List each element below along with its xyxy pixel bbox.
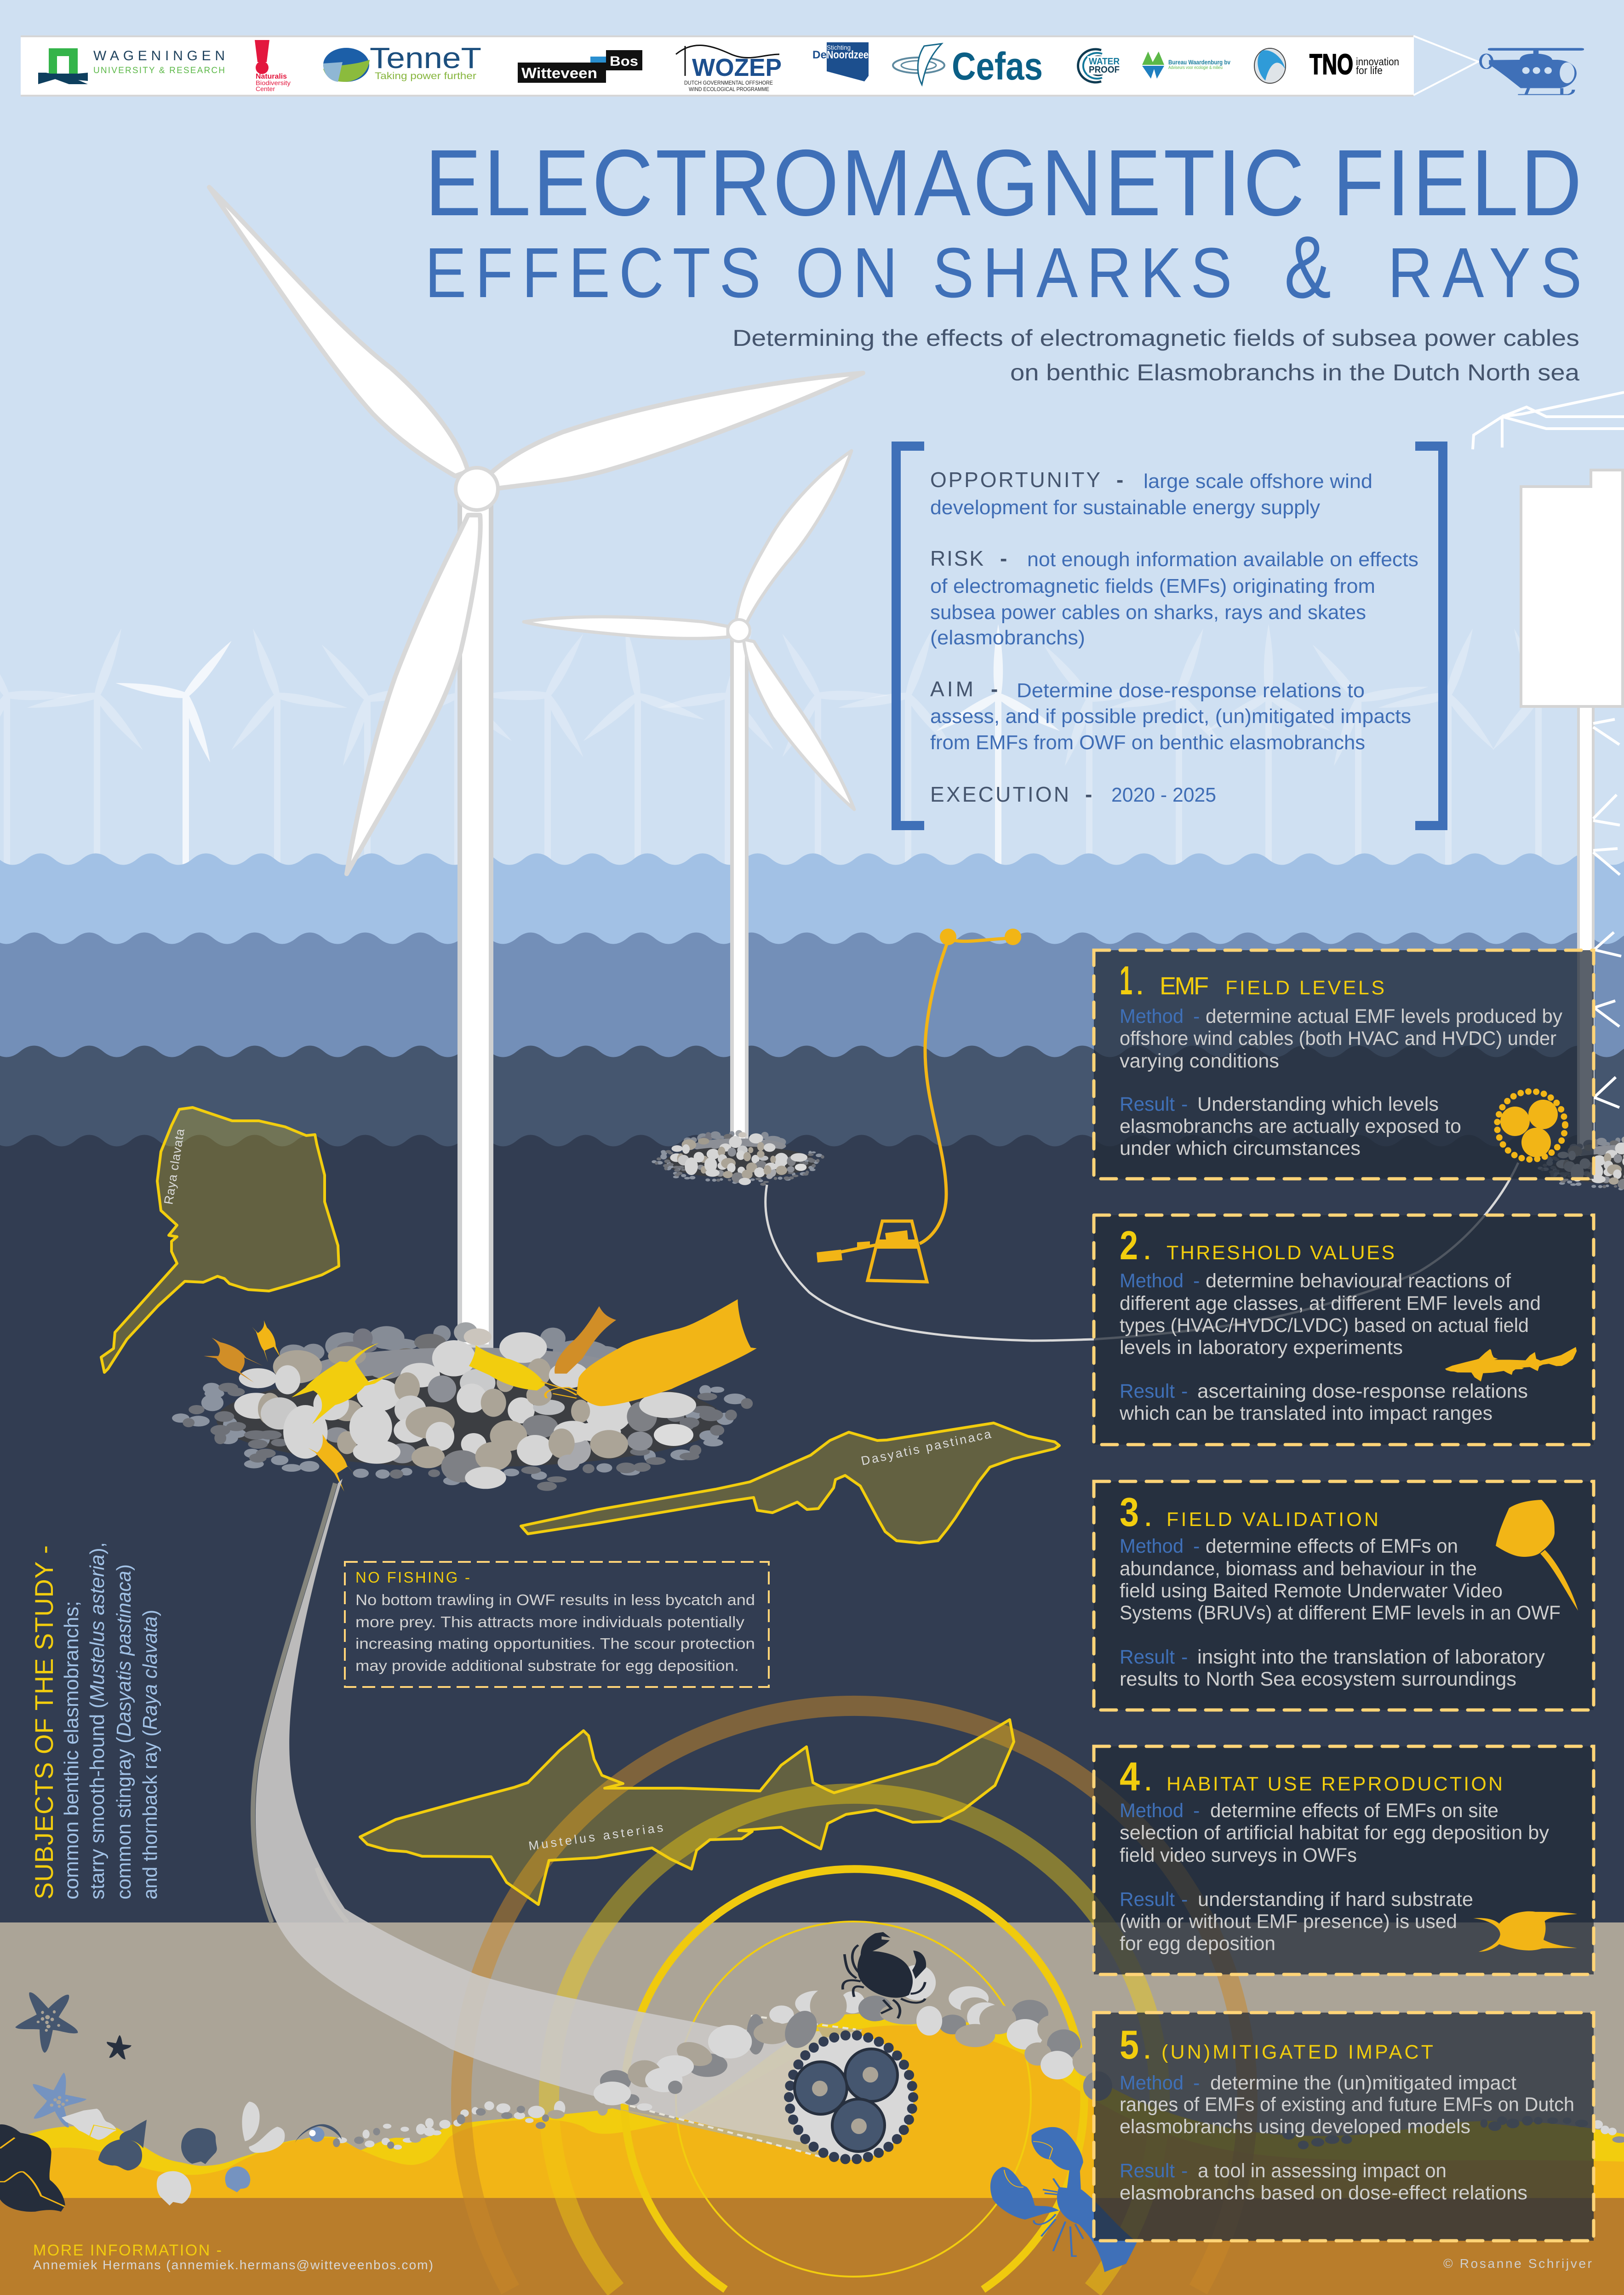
method: Method <box>1120 1270 1184 1292</box>
execution text: 2020 - 2025 <box>1111 784 1216 806</box>
result <box>1120 1646 1545 1690</box>
heading: THRESHOLD VALUES <box>1167 1242 1395 1264</box>
callout: no fishing: increasing mating opportunities. The scour protection <box>355 1635 755 1652</box>
species outline: starry smooth-hound (Mustelus asterias): Mustelus asterias <box>528 1820 664 1853</box>
panel 2: threshold values <box>1094 1215 1594 1445</box>
seabed: sand and sediment layers <box>0 1922 1624 2295</box>
method <box>1120 1005 1562 1072</box>
pebbles along the seabed <box>333 2101 565 2150</box>
method: determine actual EMF levels produced by <box>1206 1005 1562 1027</box>
species outline: thornback ray (Raya clavata) <box>101 1107 339 1372</box>
heading <box>1120 958 1384 1003</box>
pebbles on the seabed at the right <box>1282 2116 1624 2149</box>
logo: TNO innovation for life <box>1309 49 1399 80</box>
icon: buried white shell <box>157 2171 191 2205</box>
scour protection: small pile at substation <box>1538 1136 1624 1192</box>
bracket right <box>1415 446 1443 826</box>
starfish spots <box>37 2010 69 2108</box>
seabed fauna: starfish and shells <box>0 1992 342 2212</box>
stones on the buried cable <box>594 1965 1112 2116</box>
callout: no fishing <box>345 1562 769 1687</box>
execution text: - <box>1085 782 1092 806</box>
heading: FIELD LEVELS <box>1225 977 1384 999</box>
result: Result <box>1120 1093 1175 1115</box>
logo: Witteveen+Bos: Bos <box>610 54 638 69</box>
logo strip <box>21 35 1414 97</box>
callout: no fishing: more prey. This attracts more individuals potentially <box>355 1613 745 1630</box>
scour protection: small pile at second turbine <box>652 1130 824 1186</box>
method: Method <box>1120 1005 1184 1027</box>
logo: De Noordzee: Noordzee <box>827 49 869 61</box>
heading <box>1120 1754 1503 1799</box>
logo: TenneT: Taking power further <box>375 71 476 81</box>
aim text: Determine dose-response relations to <box>1017 679 1365 702</box>
title <box>425 130 1582 316</box>
icon: starfish blue <box>33 2072 86 2128</box>
heading: 3 <box>1120 1489 1139 1535</box>
result: results to North Sea ecosystem surroundings <box>1120 1668 1516 1690</box>
method: field using Baited Remote Underwater Video <box>1120 1580 1503 1602</box>
title: & <box>1284 218 1331 316</box>
text block: subjects of the study: and thornback ray (Raya clavata) <box>139 1610 161 1899</box>
main wind turbine <box>209 187 863 1347</box>
bracket left <box>896 446 924 826</box>
icon: helicopter <box>1481 48 1584 95</box>
aim text: AIM <box>930 677 973 701</box>
subtitle <box>732 325 1579 385</box>
result: Result <box>1120 1380 1175 1402</box>
risk text: not enough information available on effects <box>1027 548 1418 571</box>
result: Result <box>1120 1646 1175 1668</box>
EMF field rings <box>461 1706 1247 2289</box>
opportunity text <box>930 468 1372 519</box>
result: elasmobranchs based on dose-effect relations <box>1120 2182 1527 2204</box>
result: insight into the translation of laboratory <box>1197 1646 1545 1668</box>
logo: Cefas <box>893 44 1043 88</box>
panel: opportunity, risk, aim, execution <box>896 446 1443 826</box>
method: Method <box>1120 1535 1184 1557</box>
logo: WOZEP: WIND ECOLOGICAL PROGRAMME <box>689 86 769 92</box>
icon: buried blue shell <box>225 2166 250 2192</box>
panel 4: habitat use reproduction <box>1094 1746 1594 1974</box>
icon: egg case silhouette <box>1473 1911 1577 1952</box>
icon: white whelk <box>62 2109 116 2140</box>
icon: white razor shell <box>242 2102 260 2141</box>
result <box>1119 1380 1528 1424</box>
logo: Naturalis: Center <box>256 85 275 92</box>
method: - <box>1193 1535 1200 1557</box>
icon: cable cross-section <box>1497 1091 1565 1159</box>
method: - <box>1193 1800 1200 1822</box>
result: a tool in assessing impact on <box>1198 2160 1447 2182</box>
opportunity text: development for sustainable energy supply <box>930 496 1320 519</box>
text block: subjects of the study: common stingray (Dasyatis pastinaca) <box>113 1564 135 1899</box>
logo: Cefas: Cefas <box>952 45 1043 88</box>
result: under which circumstances <box>1120 1137 1361 1159</box>
second wind turbine <box>524 451 854 1143</box>
logo: Wageningen University & Research <box>38 48 225 84</box>
method: Systems (BRUVs) at different EMF levels in an OWF <box>1120 1602 1561 1624</box>
callout: no fishing: No bottom trawling in OWF results in less bycatch and <box>355 1591 755 1608</box>
method: offshore wind cables (both HVAC and HVDC) under <box>1120 1027 1556 1050</box>
icon: shark silhouette <box>1445 1347 1577 1382</box>
method: levels in laboratory experiments <box>1120 1337 1403 1359</box>
heading: . <box>1137 974 1143 999</box>
logo: Naturalis: Biodiversity <box>256 79 291 86</box>
icon: blue shell <box>98 2139 142 2170</box>
method <box>1120 1270 1541 1359</box>
crab <box>843 1932 926 2018</box>
heading: . <box>1145 1770 1151 1796</box>
result: - <box>1181 1380 1188 1402</box>
icon: white shell <box>249 2127 285 2153</box>
result: - <box>1181 2160 1188 2182</box>
result: for egg deposition <box>1120 1933 1275 1955</box>
logo: TenneT: TenneT <box>370 41 481 75</box>
callout: no fishing: may provide additional substrate for egg deposition. <box>355 1657 739 1674</box>
method: Method <box>1120 1800 1184 1822</box>
species outline: starry smooth-hound (Mustelus asterias) <box>360 1720 1014 1905</box>
scour protection: large stone pile at main turbine <box>172 1322 753 1491</box>
execution text: EXECUTION <box>930 782 1069 806</box>
result <box>1120 1888 1473 1955</box>
icon: dark mussel <box>181 2128 217 2164</box>
egg cases on the stone pile <box>204 1299 757 1492</box>
heading <box>1120 1489 1378 1535</box>
text block: more information <box>33 2242 433 2272</box>
panel 1: EMF field levels <box>1094 950 1594 1179</box>
logo: Waterproof: WATER <box>1089 57 1120 67</box>
method: types (HVAC/HVDC/LVDC) based on actual field <box>1120 1314 1529 1337</box>
method <box>1120 2072 1574 2138</box>
subsea power cable <box>766 1163 1518 1341</box>
whelk yellow edge <box>90 2125 116 2137</box>
risk text: of electromagnetic fields (EMFs) originating from <box>930 575 1375 597</box>
logo: TNO innovation for life: TNO <box>1309 49 1353 80</box>
panel 5: (un)mitigated impact <box>1094 2013 1594 2241</box>
method: - <box>1193 2072 1200 2094</box>
logo: TNO innovation for life: innovation <box>1356 56 1399 68</box>
magnifying beam from pile to cable cross-section <box>253 1479 864 2157</box>
text block: subjects of the study <box>29 1542 161 1899</box>
text block: subjects of the study: starry smooth-hound (Mustelus asteria), <box>86 1542 109 1899</box>
result: Result <box>1120 1888 1175 1911</box>
heading: (UN)MITIGATED IMPACT <box>1161 2041 1433 2063</box>
distant offshore wind turbines <box>0 600 1612 865</box>
text block: subjects of the study: common benthic elasmobranchs; <box>60 1601 83 1899</box>
title: RAYS <box>1388 233 1582 312</box>
logo: Waterproof <box>1078 49 1121 82</box>
logo: Naturalis: Naturalis <box>256 73 287 80</box>
logo: Waterproof: PROOF <box>1089 65 1120 75</box>
BRUV: baited remote underwater video with buoys <box>817 929 1021 1282</box>
subtitle: Determining the effects of electromagnetic fields of subsea power cables <box>732 325 1579 351</box>
credit: © Rosanne Schrijver <box>1443 2256 1592 2271</box>
method: field video surveys in OWFs <box>1120 1844 1357 1866</box>
method: selection of artificial habitat for egg deposition by <box>1120 1822 1549 1844</box>
method: - <box>1193 1005 1200 1027</box>
logo: De Noordzee <box>812 42 869 81</box>
heading <box>1120 1222 1395 1268</box>
result: - <box>1181 1093 1188 1115</box>
method: different age classes, at different EMF levels and <box>1120 1292 1541 1314</box>
method <box>1120 1800 1549 1866</box>
opportunity text: - <box>1116 468 1123 492</box>
result <box>1120 2160 1527 2204</box>
logo: Bureau Waardenburg: Bureau Waardenburg bv <box>1168 58 1230 66</box>
icon: large dark shell <box>0 2124 65 2212</box>
heading: 1 <box>1120 958 1132 1003</box>
method: abundance, biomass and behaviour in the <box>1120 1558 1477 1580</box>
aim text: - <box>991 677 998 701</box>
aim text: assess, and if possible predict, (un)mitigated impacts <box>930 705 1411 728</box>
opportunity text: large scale offshore wind <box>1144 470 1372 493</box>
logo: De Noordzee: Stichting <box>827 44 851 51</box>
method <box>1120 1535 1561 1624</box>
lobster <box>990 2127 1137 2272</box>
aim text: from EMFs from OWF on benthic elasmobranchs <box>930 731 1365 754</box>
icon: starfish small <box>107 2035 132 2060</box>
aim text <box>930 677 1411 754</box>
species outline: thornback ray (Raya clavata): Raya clavata <box>161 1127 187 1205</box>
callout: no fishing: NO FISHING - <box>355 1569 470 1586</box>
heading: 5 <box>1120 2022 1139 2067</box>
method: Method <box>1120 2072 1184 2094</box>
risk text: subsea power cables on sharks, rays and skates <box>930 601 1366 624</box>
risk text: - <box>1000 546 1007 570</box>
result: (with or without EMF presence) is used <box>1120 1911 1457 1933</box>
result: Understanding which levels <box>1197 1093 1439 1115</box>
text block: more information: Annemiek Hermans (annemiek.hermans@witteveenbos.com) <box>33 2258 433 2272</box>
method: determine the (un)mitigated impact <box>1210 2072 1516 2094</box>
subtitle: on benthic Elasmobranchs in the Dutch North sea <box>1010 360 1579 385</box>
text block: more information: MORE INFORMATION - <box>33 2242 222 2259</box>
title: ELECTROMAGNETIC FIELD <box>425 130 1582 235</box>
method: ranges of EMFs of existing and future EMFs on Dutch <box>1120 2094 1574 2116</box>
logo: WOZEP: WOZEP <box>692 54 782 81</box>
logo: Wageningen University & Research: UNIVERSITY & RESEARCH <box>93 66 225 75</box>
method: determine effects of EMFs on <box>1206 1535 1458 1557</box>
panel 3: field validation <box>1094 1481 1594 1710</box>
result: elasmobranchs are actually exposed to <box>1120 1115 1461 1137</box>
heading: HABITAT USE REPRODUCTION <box>1167 1773 1503 1795</box>
icon: blue clam <box>309 2127 325 2142</box>
method: varying conditions <box>1120 1050 1279 1072</box>
result: - <box>1181 1888 1188 1911</box>
result: understanding if hard substrate <box>1198 1888 1473 1911</box>
title: EFFECTS ON SHARKS <box>425 233 1232 312</box>
heading: EMF <box>1160 972 1209 1000</box>
logo: WOZEP: DUTCH GOVERNMENTAL OFFSHORE <box>684 80 773 86</box>
method: determine effects of EMFs on site <box>1210 1800 1498 1822</box>
icon: starfish large <box>15 1992 78 2053</box>
logo: Bureau Waardenburg: Adviseurs voor ecologie & milieu <box>1168 65 1223 70</box>
execution text <box>930 782 1216 806</box>
risk text <box>930 546 1418 649</box>
offshore substation platform <box>1473 392 1624 1154</box>
logo: De Noordzee: De <box>812 49 827 61</box>
icon: blue whelk <box>120 2120 147 2148</box>
logo: Naturalis <box>255 40 291 92</box>
opportunity text: OPPORTUNITY <box>930 468 1100 492</box>
logo: TNO innovation for life: for life <box>1356 64 1383 76</box>
heading: . <box>1144 1239 1150 1264</box>
logo: Wageningen University & Research: WAGENINGEN <box>93 48 225 63</box>
dark shell yellow edge <box>0 2138 64 2206</box>
heading: . <box>1145 1505 1151 1531</box>
result <box>1120 1093 1461 1159</box>
method: - <box>1193 1270 1200 1292</box>
cable cross-section <box>789 2035 914 2160</box>
logo: Seamarco round emblem <box>1254 48 1286 83</box>
icon: ray silhouette <box>1496 1500 1578 1611</box>
sea: wave bands <box>0 854 1624 2244</box>
logo: Witteveen+Bos <box>518 50 642 83</box>
method: determine behavioural reactions of <box>1206 1270 1511 1292</box>
heading: . <box>1144 2038 1150 2064</box>
clam highlight <box>309 2130 315 2136</box>
result: ascertaining dose-response relations <box>1197 1380 1528 1402</box>
logo: Bureau Waardenburg <box>1142 52 1230 79</box>
heading: 4 <box>1120 1754 1140 1799</box>
logo: Witteveen+Bos: Witteveen <box>521 65 597 81</box>
heading <box>1120 2022 1433 2067</box>
text block: subjects of the study: SUBJECTS OF THE STUDY - <box>29 1545 58 1899</box>
result: which can be translated into impact ranges <box>1119 1402 1492 1424</box>
logo: TenneT <box>323 41 481 82</box>
result: - <box>1181 1646 1188 1668</box>
method: elasmobranchs using developed models <box>1120 2116 1470 2138</box>
result: Result <box>1120 2160 1175 2182</box>
icon: cockle arc <box>295 2124 342 2143</box>
species outline: common stingray (Dasyatis pastinaca): Dasyatis pastinaca <box>860 1427 993 1468</box>
species outline: common stingray (Dasyatis pastinaca) <box>521 1423 1059 1543</box>
tow lines from logo strip to helicopter <box>1413 36 1478 95</box>
logo: WOZEP <box>676 45 782 92</box>
heading: FIELD VALIDATION <box>1167 1509 1378 1531</box>
heading: 2 <box>1120 1222 1138 1268</box>
risk text: (elasmobranchs) <box>930 626 1085 649</box>
risk text: RISK <box>930 546 984 570</box>
